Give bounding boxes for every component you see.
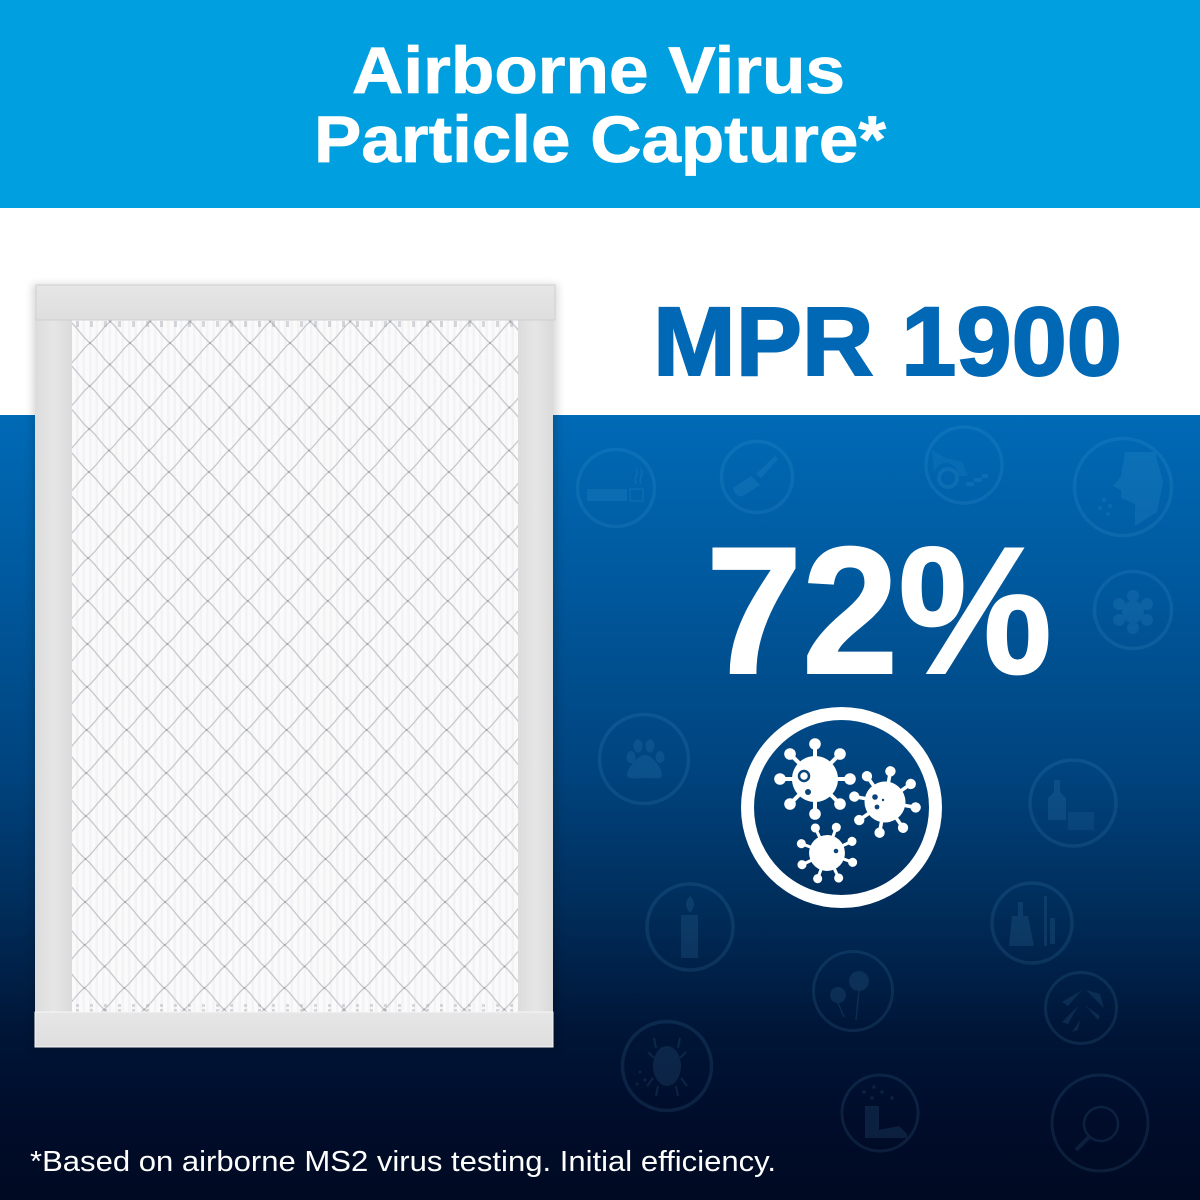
background contaminant icons xyxy=(578,427,1172,1171)
icon: virus particles in circle xyxy=(748,714,936,902)
white band xyxy=(0,208,1200,415)
title xyxy=(314,33,886,176)
small virus xyxy=(786,812,868,894)
top frame xyxy=(36,285,555,320)
title: Particle Capture* xyxy=(314,102,886,176)
air filter product image xyxy=(32,284,558,1050)
header band xyxy=(0,0,1200,208)
blue gradient panel xyxy=(0,415,1200,1200)
medium virus xyxy=(843,760,927,844)
pleat edge marks xyxy=(72,320,518,1012)
icon: flower xyxy=(1094,572,1172,648)
icon: paw xyxy=(600,714,688,804)
right frame xyxy=(518,318,553,1014)
rating heading: MPR 1900 xyxy=(653,287,1122,396)
icon: brush xyxy=(722,442,792,512)
icon: leaves xyxy=(1046,972,1116,1044)
icon: car exhaust xyxy=(926,427,1002,503)
footnote: *Based on airborne MS2 virus testing. Initial efficiency. xyxy=(30,1146,776,1178)
title: Airborne Virus xyxy=(352,33,845,107)
icon: magnifier xyxy=(1052,1075,1148,1171)
wire mesh xyxy=(72,320,518,1012)
bottom frame xyxy=(35,1012,553,1047)
frame shadow xyxy=(32,284,558,1050)
large virus xyxy=(774,738,856,820)
icon: sneezing face xyxy=(1074,438,1172,536)
icon: dustpan and broom xyxy=(992,883,1072,963)
icon: smokestack xyxy=(842,1075,918,1151)
icon: cigarette xyxy=(578,450,654,526)
icon: cleaning bottle xyxy=(1030,760,1116,846)
left frame xyxy=(35,318,72,1014)
icon: dust mite xyxy=(622,1022,712,1110)
icon: candle xyxy=(647,884,733,970)
efficiency percentage: 72% xyxy=(706,510,1052,712)
icon: wildflowers xyxy=(814,952,892,1030)
pleated media xyxy=(72,320,518,1012)
